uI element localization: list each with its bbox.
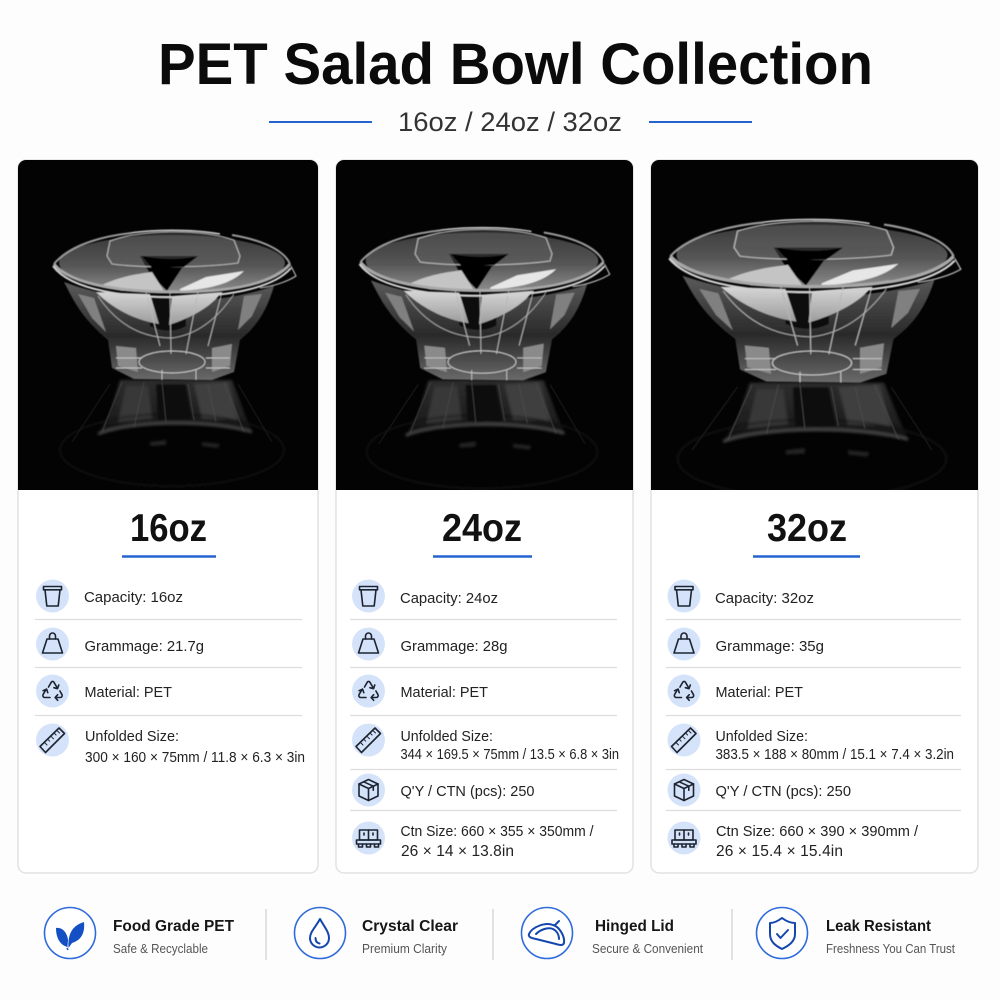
row: capacity [668,580,814,612]
row: unfolded size: 344 × 169.5 × 75mm / 13.5 × 6.8 × 3in [400,747,619,763]
feature: crystal clear: Crystal Clear [362,918,458,935]
heading: 16oz: 16oz [130,507,207,550]
row: carton size: Ctn Size: 660 × 390 × 390mm / [716,824,919,840]
row: unfolded size [352,724,619,763]
panel: 16oz [18,160,318,873]
row: unfolded size [36,724,305,766]
row: unfolded size: Unfolded Size: [85,729,179,745]
heading: 32oz: 32oz [767,507,847,550]
icon: leaves [56,922,84,950]
row: unfolded size: Unfolded Size: [716,729,808,745]
row: material: Material: PET [400,685,488,701]
row: material: Material: PET [84,685,172,701]
row: grammage: Grammage: 28g [400,639,508,655]
row: quantity per carton: Q'Y / CTN (pcs): 250 [400,784,534,800]
row: quantity per carton: Q'Y / CTN (pcs): 250 [716,784,851,800]
row: carton size [668,822,919,860]
row: grammage [352,628,508,660]
row: carton size: 26 × 15.4 × 15.4in [716,843,843,860]
feature: crystal clear: Premium Clarity [362,942,448,956]
heading: 24oz: 24oz [442,507,522,550]
title: PET Salad Bowl Collection [158,32,873,97]
feature: leak resistant [756,908,955,958]
row: unfolded size: 383.5 × 188 × 80mm / 15.1 × 7.4 × 3.2in [716,747,954,763]
row: carton size [352,822,594,860]
feature: food grade PET: Safe & Recyclable [113,942,208,956]
product photo: 16oz bowl [18,160,318,490]
row: material [352,674,488,708]
feature: crystal clear [294,908,458,958]
row: capacity: Capacity: 24oz [400,591,498,607]
product photo: 24oz bowl [336,160,633,490]
row: quantity per carton [668,774,851,806]
row: unfolded size [668,724,954,763]
icon: hinged lid [529,921,564,945]
subtitle with rules: 16oz / 24oz / 32oz [398,107,622,137]
feature: hinged lid: Secure & Convenient [592,942,703,956]
row: carton size: 26 × 14 × 13.8in [401,843,514,860]
panel: 32oz [651,160,978,873]
icon: water drop [310,919,329,948]
feature: food grade PET: Food Grade PET [113,918,234,935]
icon: shield with check [770,918,795,949]
row: capacity [352,580,498,612]
feature: hinged lid [522,908,703,958]
row: capacity: Capacity: 32oz [715,591,814,607]
product photo: 32oz bowl [651,160,978,498]
row: grammage [668,628,824,660]
row: material [668,674,803,708]
feature: leak resistant: Freshness You Can Trust [826,942,955,956]
row: grammage [36,628,204,660]
row: material: Material: PET [716,685,803,701]
row: capacity: Capacity: 16oz [84,590,183,606]
feature: leak resistant: Leak Resistant [826,918,932,935]
feature: food grade PET [44,908,234,958]
row: carton size: Ctn Size: 660 × 355 × 350mm / [400,824,594,840]
row: quantity per carton [352,774,534,806]
row: unfolded size: 300 × 160 × 75mm / 11.8 × 6.3 × 3in [85,750,305,766]
row: unfolded size: Unfolded Size: [400,729,493,745]
row: capacity [36,580,183,612]
row: material [36,674,172,708]
panel: 24oz [336,160,633,873]
row: grammage: Grammage: 21.7g [84,639,204,655]
feature: hinged lid: Hinged Lid [595,918,674,935]
row: grammage: Grammage: 35g [716,639,824,655]
